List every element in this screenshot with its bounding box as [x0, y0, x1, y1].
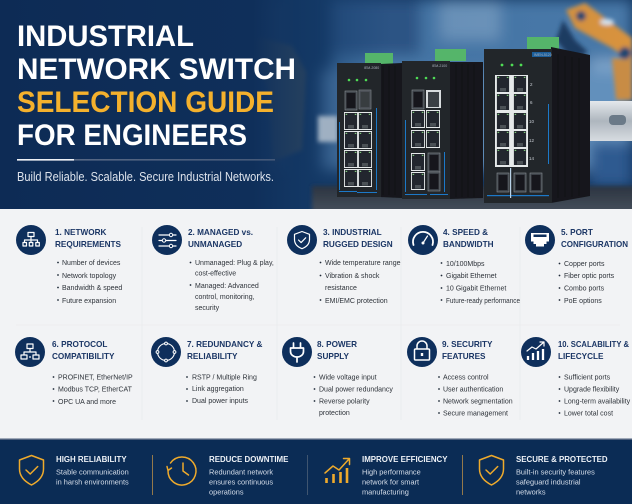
- bullet list: Long-term availability: [564, 398, 631, 406]
- bullet list: [53, 374, 133, 406]
- bullet list: Vibration & shock: [325, 273, 380, 280]
- port numbers: 6: [530, 100, 533, 105]
- bullet list: [314, 374, 393, 417]
- icon: ring: [151, 337, 181, 367]
- heading: 2. MANAGED vs.: [188, 228, 253, 237]
- bullet list: [559, 374, 631, 418]
- bullet list: [559, 261, 615, 305]
- bullet list: Access control: [443, 374, 489, 382]
- heading: LIFECYCLE: [558, 352, 604, 361]
- switch 3: IMEN-5120: [534, 53, 552, 57]
- bullet list: PROFINET, EtherNet/IP: [58, 374, 133, 382]
- icon: network nodes: [15, 337, 45, 367]
- switch 3: [484, 37, 590, 203]
- bullet list: Combo ports: [564, 286, 605, 292]
- left navy overlay: [0, 0, 632, 209]
- heading: 4. SPEED &: [443, 228, 488, 237]
- bullet list: PoE options: [564, 298, 602, 305]
- bullet list: RSTP / Multiple Ring: [192, 374, 257, 382]
- switch 2: IEM-2100: [432, 64, 447, 68]
- blurred factory background: [215, 0, 632, 187]
- text: in harsh environments: [56, 478, 129, 486]
- bullet list: User authentication: [443, 386, 503, 394]
- bullet list: Future expansion: [62, 298, 116, 305]
- card 5: port configuration: [525, 225, 628, 305]
- bullet list: [186, 374, 257, 405]
- text: Stable communication: [56, 468, 129, 476]
- title: INDUSTRIAL: [17, 20, 194, 53]
- bullet list: [438, 374, 513, 418]
- icon: growth chart: [521, 337, 551, 367]
- title: [17, 20, 296, 152]
- port numbers: 10: [529, 119, 535, 124]
- din rail right: [589, 101, 632, 141]
- bullet list: Modbus TCP, EtherCAT: [58, 386, 133, 394]
- bullet list: EMI/EMC protection: [325, 298, 388, 305]
- bullet list: Reverse polarity: [319, 398, 370, 406]
- bullet list: Fiber optic ports: [564, 273, 615, 280]
- bullet list: Sufficient ports: [564, 374, 611, 382]
- card 7: redundancy and reliability: [151, 337, 262, 405]
- bullet list: Future-ready performance: [446, 298, 520, 305]
- green connector 2: [435, 49, 466, 61]
- card 4: speed and bandwidth: [408, 225, 520, 305]
- green connector 3: [527, 37, 559, 49]
- bullet list: control, monitoring,: [195, 294, 255, 301]
- text: SECURE & PROTECTED: [516, 455, 608, 464]
- footer band: [0, 438, 632, 504]
- card 10: scalability and lifecycle: [521, 337, 631, 418]
- bullet list: [441, 261, 520, 305]
- text: Built-in security features: [516, 468, 595, 476]
- bullet list: Unmanaged: Plug & play,: [195, 260, 274, 267]
- heading: 6. PROTOCOL: [52, 340, 107, 349]
- heading: RUGGED DESIGN: [323, 240, 393, 249]
- din rail left: [318, 116, 338, 142]
- bullet list: [190, 260, 274, 312]
- text: HIGH RELIABILITY: [56, 455, 127, 464]
- text: ensures continuous: [209, 478, 273, 486]
- heading: 9. SECURITY: [442, 340, 493, 349]
- bullet list: Network segmentation: [443, 398, 513, 406]
- green connector 1: [365, 53, 393, 64]
- bullet list: cost-effective: [195, 270, 236, 278]
- bullet list: Bandwidth & speed: [62, 285, 122, 292]
- bullet list: 10 Gigabit Ethernet: [446, 286, 506, 292]
- icon: growth bars: [325, 458, 350, 483]
- text: REDUCE DOWNTIME: [209, 455, 288, 464]
- bullet list: 10/100Mbps: [446, 261, 485, 268]
- heading: SUPPLY: [317, 352, 350, 361]
- text: IMPROVE EFFICIENCY: [362, 455, 448, 464]
- text: High performance: [362, 468, 421, 476]
- icon: shield: [287, 225, 317, 255]
- port numbers: 14: [529, 156, 535, 161]
- bullet list: resistance: [325, 285, 357, 292]
- robot arm, left: [205, 38, 306, 162]
- title: FOR ENGINEERS: [17, 119, 247, 152]
- floor: [312, 186, 632, 216]
- heading: UNMANAGED: [188, 240, 242, 249]
- bullet list: [320, 260, 401, 305]
- switch 1: IEM-2080: [364, 66, 379, 70]
- heading: REQUIREMENTS: [55, 240, 121, 249]
- bullet list: Copper ports: [564, 261, 605, 268]
- heading: BANDWIDTH: [443, 240, 494, 249]
- bullet list: OPC UA and more: [58, 399, 116, 406]
- heading: 7. REDUNDANCY &: [187, 340, 262, 349]
- heading: CONFIGURATION: [561, 240, 628, 249]
- text: manufacturing: [362, 488, 409, 496]
- benefit: improve efficiency: [325, 455, 448, 496]
- hero banner: [0, 0, 632, 216]
- bullet list: Wide voltage input: [319, 374, 377, 382]
- title: SELECTION GUIDE: [17, 86, 274, 119]
- bullet list: Gigabit Ethernet: [446, 273, 497, 280]
- heading: FEATURES: [442, 352, 486, 361]
- content panel: [0, 209, 632, 440]
- bullet list: Upgrade flexibility: [564, 386, 620, 394]
- heading: 3. INDUSTRIAL: [323, 228, 382, 237]
- bullet list: [57, 260, 122, 305]
- title rule: [17, 159, 275, 161]
- icon: padlock: [407, 337, 437, 367]
- bullet list: Dual power redundancy: [319, 386, 393, 394]
- icon: sliders: [152, 225, 182, 255]
- icon: ethernet port: [525, 225, 555, 255]
- subtitle: Build Reliable. Scalable. Secure Industrial Networks.: [17, 170, 274, 184]
- bullet list: security: [195, 305, 220, 312]
- bullet list: Lower total cost: [564, 410, 613, 418]
- robot arm, right: [556, 3, 632, 100]
- heading: RELIABILITY: [187, 352, 238, 361]
- bullet list: Network topology: [62, 273, 117, 280]
- heading: 1. NETWORK: [55, 228, 106, 237]
- card 1: network requirements: [16, 225, 122, 305]
- port numbers: 12: [529, 138, 535, 143]
- benefit: reduce downtime: [167, 455, 288, 496]
- text: operations: [209, 488, 244, 496]
- switch 1: [337, 53, 402, 198]
- bullet list: Number of devices: [62, 260, 121, 267]
- bullet list: protection: [319, 410, 350, 417]
- card 2: managed vs unmanaged: [152, 225, 274, 312]
- heading: 8. POWER: [317, 340, 357, 349]
- text: network for smart: [362, 478, 419, 486]
- text: safeguard industrial: [516, 478, 581, 486]
- icon: clock: [167, 457, 196, 485]
- port numbers: 2: [530, 82, 533, 87]
- bullet list: Secure management: [443, 410, 508, 418]
- benefit: high reliability: [20, 455, 129, 486]
- heading: 10. SCALABILITY &: [558, 340, 629, 349]
- icon: hierarchy: [16, 225, 46, 255]
- heading: 5. PORT: [561, 228, 593, 237]
- heading: COMPATIBILITY: [52, 352, 115, 361]
- icon: gauge: [408, 225, 438, 255]
- icon: shield check: [20, 456, 44, 485]
- text: Redundant network: [209, 468, 273, 476]
- icon: plug: [282, 337, 312, 367]
- card 6: protocol compatibility: [15, 337, 133, 406]
- bullet list: Wide temperature range: [325, 260, 401, 267]
- icon: shield check: [480, 456, 504, 485]
- bullet list: Managed: Advanced: [195, 283, 259, 290]
- text: networks: [516, 488, 546, 496]
- benefit: secure and protected: [480, 455, 608, 496]
- bullet list: Dual power inputs: [192, 398, 249, 405]
- card 8: power supply: [282, 337, 393, 417]
- port numbers: [529, 82, 535, 161]
- title: NETWORK SWITCH: [17, 53, 296, 86]
- card 3: industrial rugged design: [287, 225, 401, 305]
- card 9: security features: [407, 337, 513, 418]
- bullet list: Link aggregation: [192, 386, 244, 393]
- switch 2: [402, 49, 483, 199]
